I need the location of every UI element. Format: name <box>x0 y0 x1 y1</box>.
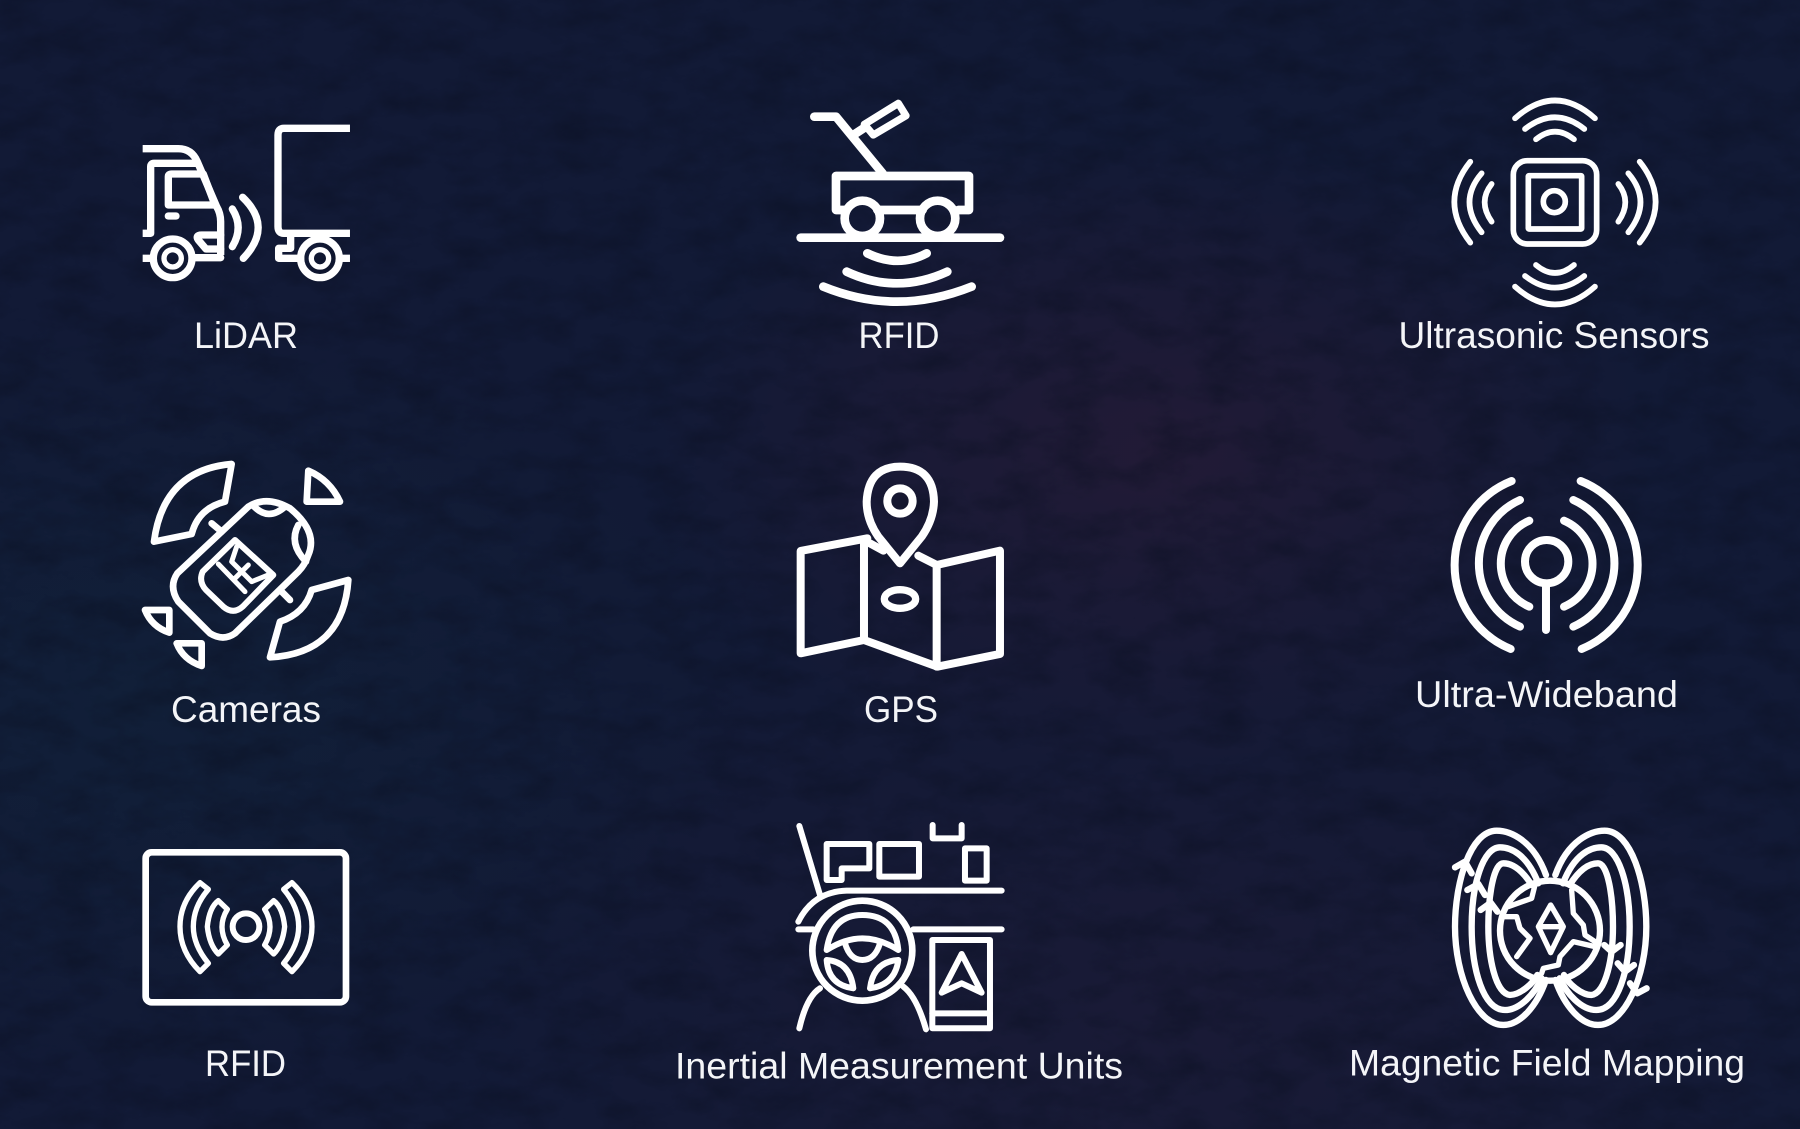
item: Magnetic Field Mapping <box>1349 831 1745 1084</box>
label: Ultrasonic Sensors <box>1398 315 1710 356</box>
icon: square sensor emitting waves <box>1454 100 1656 304</box>
item: Cameras <box>145 464 348 730</box>
item: LiDAR <box>143 128 350 356</box>
icon: antenna with concentric arcs <box>1455 481 1638 649</box>
label: RFID <box>205 1043 286 1084</box>
icon: card with signal <box>146 852 346 1002</box>
icon: folded map with location pin <box>801 467 1000 667</box>
item: RFID card <box>146 852 346 1084</box>
label: Cameras <box>171 689 321 730</box>
label: Inertial Measurement Units <box>675 1046 1123 1086</box>
label: LiDAR <box>194 315 298 356</box>
icon: truck and trailer with signal waves <box>143 128 350 278</box>
icon: cart with floor signal <box>801 103 1000 302</box>
icon: car dashboard with steering wheel and navigation screen <box>798 825 1002 1029</box>
label: Magnetic Field Mapping <box>1349 1042 1745 1084</box>
label: RFID <box>858 315 940 356</box>
icon: car from above with camera cones <box>145 464 348 666</box>
item: Ultra-Wideband <box>1415 481 1678 715</box>
item: RFID cart <box>801 103 1000 356</box>
item: GPS <box>801 467 1000 730</box>
item: Ultrasonic Sensors <box>1398 100 1710 356</box>
label: GPS <box>864 689 938 730</box>
label: Ultra-Wideband <box>1415 674 1678 715</box>
icon: globe with magnetic field loops <box>1455 831 1647 1025</box>
item: Inertial Measurement Units <box>675 825 1123 1086</box>
